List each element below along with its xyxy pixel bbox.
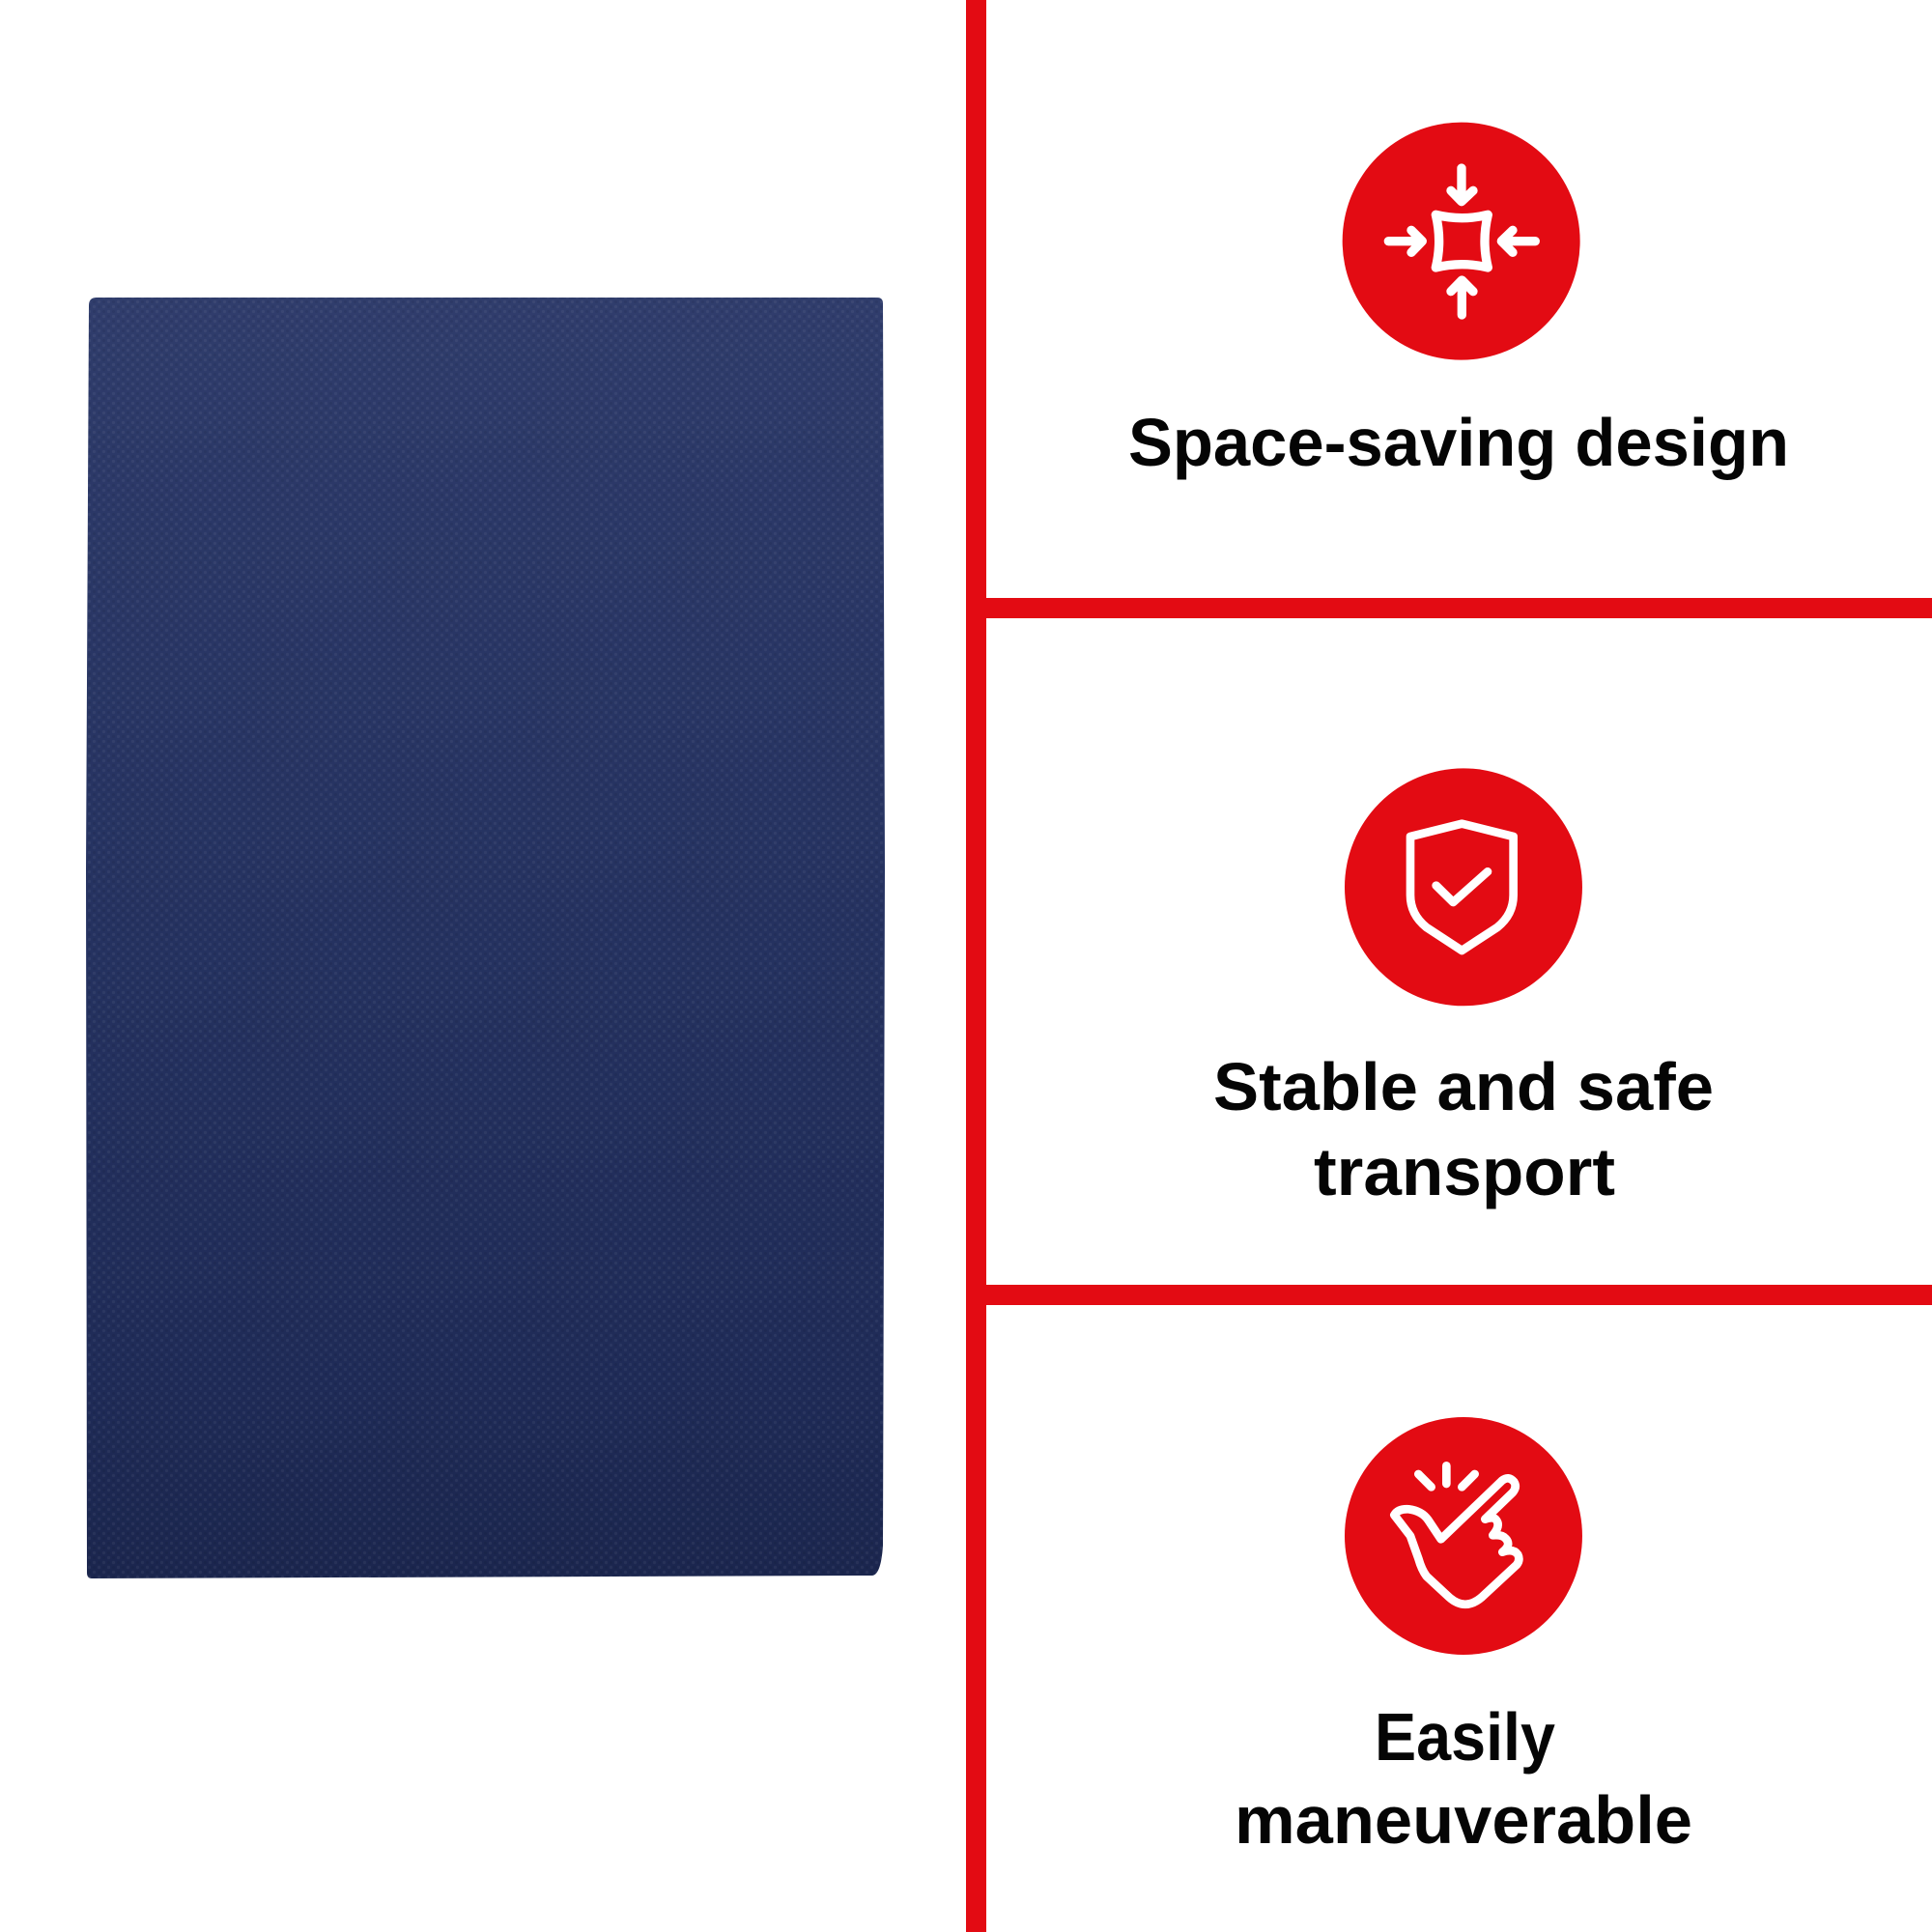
product image: navy textured mat	[86, 298, 885, 1578]
panel: stable and safe transport	[1213, 768, 1714, 1209]
label: easily maneuverable: Easily	[1375, 1699, 1555, 1775]
label: space-saving design: Space-saving design	[1128, 405, 1789, 480]
lower horizontal red divider	[986, 1285, 1932, 1305]
label: stable and safe transport: Stable and safe	[1213, 1049, 1714, 1124]
icon: compress arrows	[1343, 123, 1580, 360]
icon: snapping fingers hand	[1345, 1417, 1582, 1655]
top horizontal red divider	[986, 598, 1932, 618]
label: stable and safe transport: transport	[1314, 1134, 1615, 1209]
label: easily maneuverable	[1235, 1699, 1692, 1858]
vertical red divider	[966, 0, 986, 1932]
icon: shield with check	[1345, 768, 1582, 1006]
label: stable and safe transport	[1213, 1049, 1714, 1209]
label: easily maneuverable: maneuverable	[1235, 1782, 1692, 1858]
panel: space-saving design	[1128, 123, 1789, 480]
panel: easily maneuverable	[1235, 1417, 1692, 1858]
